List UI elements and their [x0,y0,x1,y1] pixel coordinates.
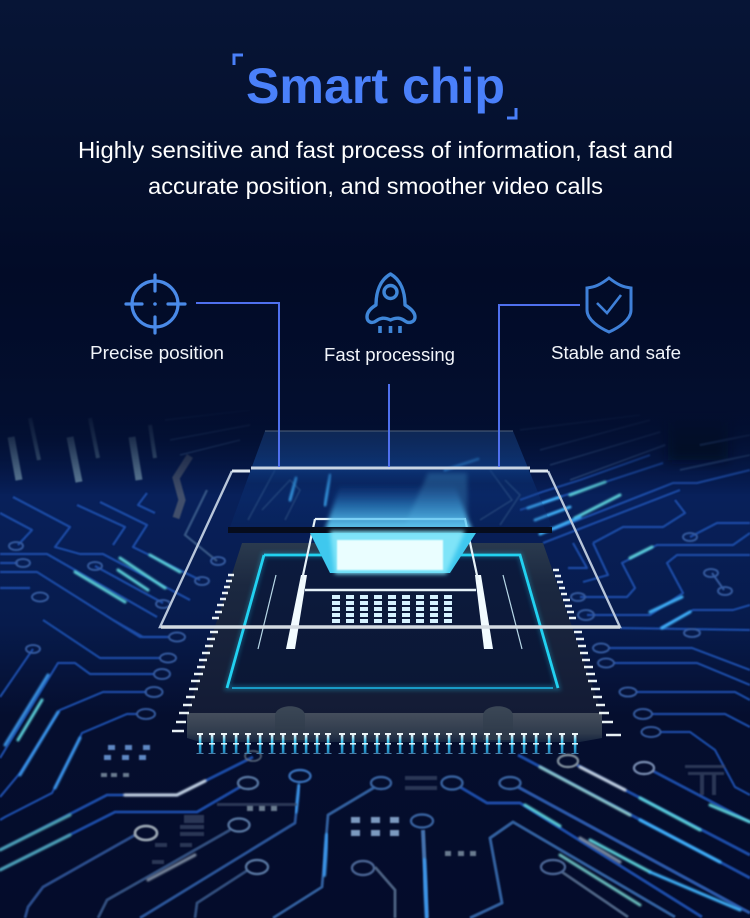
edge pins [172,570,621,735]
left upper traces [0,490,225,637]
icon: target [126,275,185,333]
right lower traces [371,644,750,918]
inner white frame [302,519,478,590]
title brackets [234,55,516,118]
cyan inner frame [227,555,558,688]
subtitle [78,137,673,199]
label: stable and safe: Stable and safe [551,343,681,363]
chip [172,519,621,754]
subtitle: Highly sensitive and fast process of information, fast and [78,137,673,163]
streaks beneath the glass [290,459,478,505]
icon: shield [587,278,631,332]
traces beneath the glass [248,470,520,525]
right upper traces [520,455,750,637]
label: fast processing: Fast processing [324,345,455,365]
label: precise position: Precise position [90,343,224,363]
top fade over circuit board [0,404,750,494]
chip top face [187,543,602,713]
upper glass panel [230,431,552,527]
dot grid [332,595,452,623]
white rails [286,575,493,649]
title: Smart chip [246,58,505,114]
front pins [196,733,578,754]
distant components left [11,418,190,518]
light beam [325,473,472,530]
circuit board traces [0,410,750,918]
dark band of glass edge [228,527,552,533]
glowing light block [310,531,476,574]
chip front face [187,713,602,742]
dark component right [668,420,728,460]
glass frame [160,431,620,627]
mounting bumps [275,706,513,740]
subtitle: accurate position, and smoother video calls [148,173,603,199]
icon: rocket [367,274,415,333]
thin white rails [258,575,522,649]
small solder pads [101,745,725,864]
distant faint traces [165,410,750,480]
connector lines [196,303,580,467]
left lower traces [0,620,375,918]
